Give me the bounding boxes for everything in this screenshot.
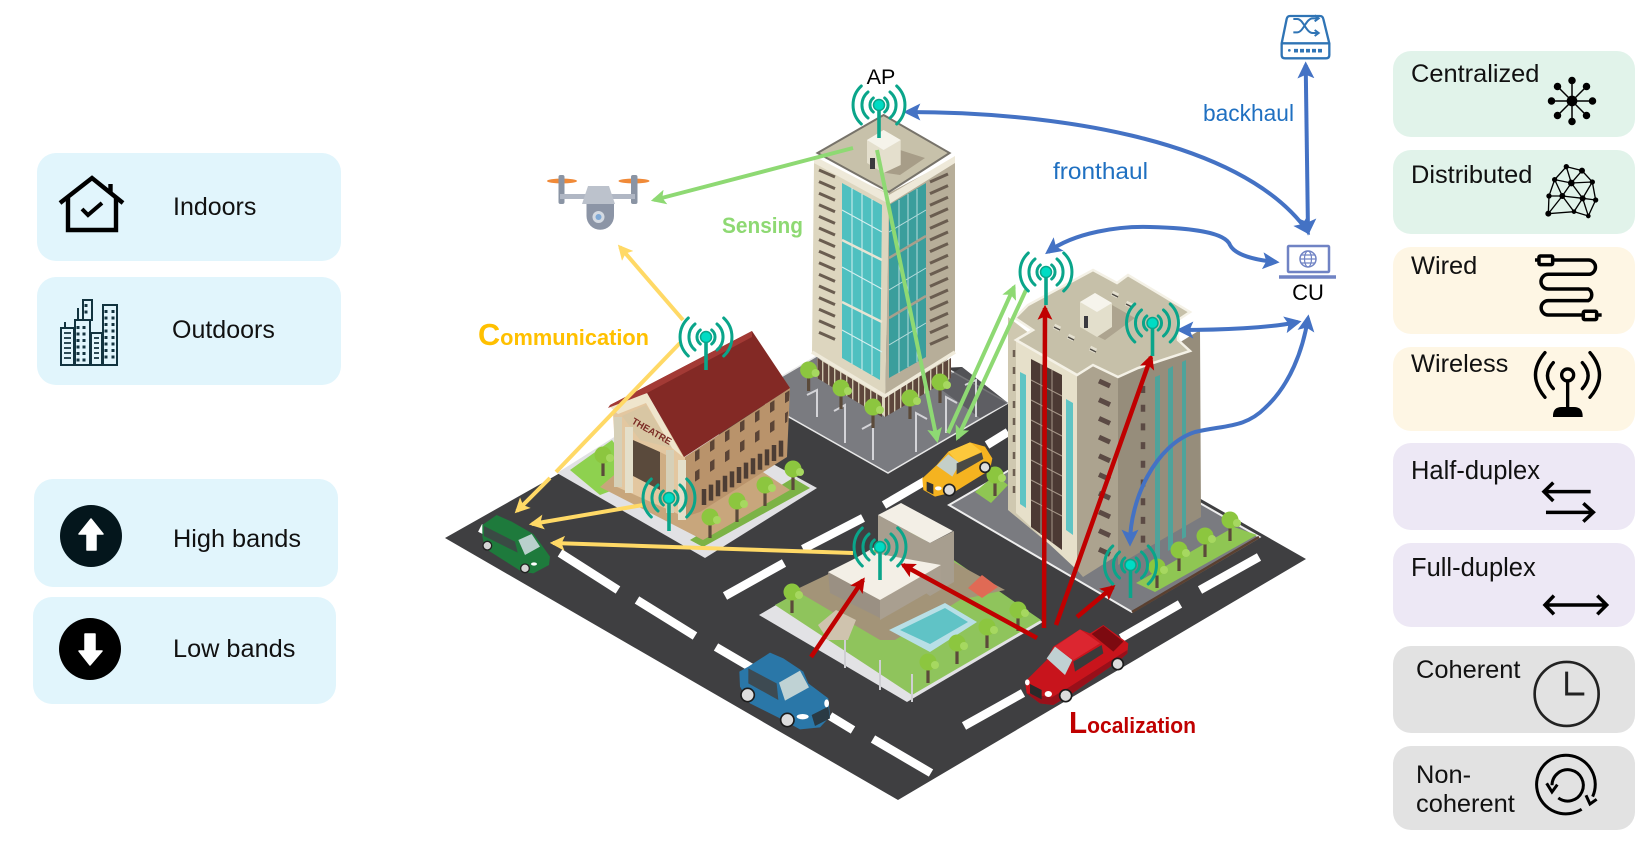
icon: two opposite arrows bbox=[1544, 483, 1593, 522]
label: half-duplex: Half-duplex bbox=[1411, 457, 1540, 485]
icon: antenna bbox=[1535, 353, 1599, 416]
icon: double-headed arrow bbox=[1545, 596, 1607, 614]
label: indoors: Indoors bbox=[173, 193, 256, 221]
label: CU: CU bbox=[1292, 280, 1324, 305]
label: localization: Localization bbox=[1069, 705, 1196, 740]
icon: cable bbox=[1535, 256, 1602, 320]
icon: mesh network bbox=[1546, 165, 1598, 218]
icon: down arrow circle bbox=[59, 618, 121, 680]
label: backhaul: backhaul bbox=[1203, 100, 1294, 126]
road surface bbox=[445, 367, 1306, 800]
label: low bands: Low bands bbox=[173, 635, 295, 663]
blue car bbox=[739, 653, 830, 729]
label: full-duplex: Full-duplex bbox=[1411, 554, 1536, 582]
label: wireless: Wireless bbox=[1411, 350, 1508, 378]
tall tower bbox=[812, 115, 955, 417]
arrows: communication bbox=[517, 247, 853, 553]
icon: core switch bbox=[1282, 15, 1329, 58]
panel: non-coherent bbox=[1393, 746, 1635, 830]
panel: outdoors bbox=[37, 277, 341, 385]
panel: half-duplex bbox=[1393, 443, 1635, 530]
panel: centralized bbox=[1393, 51, 1635, 137]
label: AP: AP bbox=[867, 65, 895, 89]
theatre plot bbox=[557, 405, 817, 558]
label: distributed: Distributed bbox=[1411, 161, 1532, 189]
label: communication: Communication bbox=[478, 317, 649, 352]
house plot bbox=[759, 530, 1043, 702]
road dashes bbox=[480, 432, 1259, 773]
label: fronthaul: fronthaul bbox=[1053, 158, 1148, 184]
label: outdoors: Outdoors bbox=[172, 316, 275, 344]
city scene bbox=[445, 15, 1336, 800]
label: high bands: High bands bbox=[173, 525, 301, 553]
panel: indoors bbox=[37, 153, 341, 261]
panel: wireless bbox=[1393, 347, 1635, 431]
panel: full-duplex bbox=[1393, 543, 1635, 627]
icon: rotating arrows bbox=[1537, 755, 1597, 814]
trees bbox=[594, 362, 1241, 683]
label: coherent: Coherent bbox=[1416, 656, 1520, 684]
theatre building bbox=[608, 331, 790, 520]
green van bbox=[482, 515, 550, 573]
icon: house with check bbox=[60, 178, 123, 230]
red pickup truck bbox=[1025, 625, 1128, 705]
icon: city buildings bbox=[61, 300, 117, 365]
label: non-coherent: coherent bbox=[1416, 790, 1515, 818]
arrows: sensing bbox=[654, 148, 1026, 440]
icon: clock bbox=[1535, 662, 1599, 726]
label: non-coherent: Non- bbox=[1416, 761, 1471, 789]
theatre sign: THEATRE bbox=[630, 416, 673, 448]
right building plot bbox=[949, 432, 1260, 612]
panel: distributed bbox=[1393, 150, 1635, 234]
drone bbox=[547, 175, 650, 230]
access points bbox=[643, 86, 1178, 598]
yellow taxi bbox=[922, 442, 992, 497]
panel: wired bbox=[1393, 247, 1635, 334]
arrows: fronthaul and backhaul bbox=[907, 65, 1308, 543]
label: wired: Wired bbox=[1411, 252, 1477, 280]
label: sensing: Sensing bbox=[722, 213, 803, 238]
icon: CU laptop bbox=[1279, 246, 1336, 277]
house bbox=[828, 503, 954, 620]
panel: low bands bbox=[33, 597, 336, 704]
panel: coherent bbox=[1393, 646, 1635, 733]
arrows: localization bbox=[811, 308, 1151, 657]
icon: star network bbox=[1548, 78, 1596, 124]
panel: high bands bbox=[34, 479, 338, 587]
label: centralized: Centralized bbox=[1411, 60, 1539, 88]
tall building plaza bbox=[750, 325, 1008, 473]
right building bbox=[1008, 270, 1201, 577]
icon: up arrow circle bbox=[60, 505, 122, 567]
